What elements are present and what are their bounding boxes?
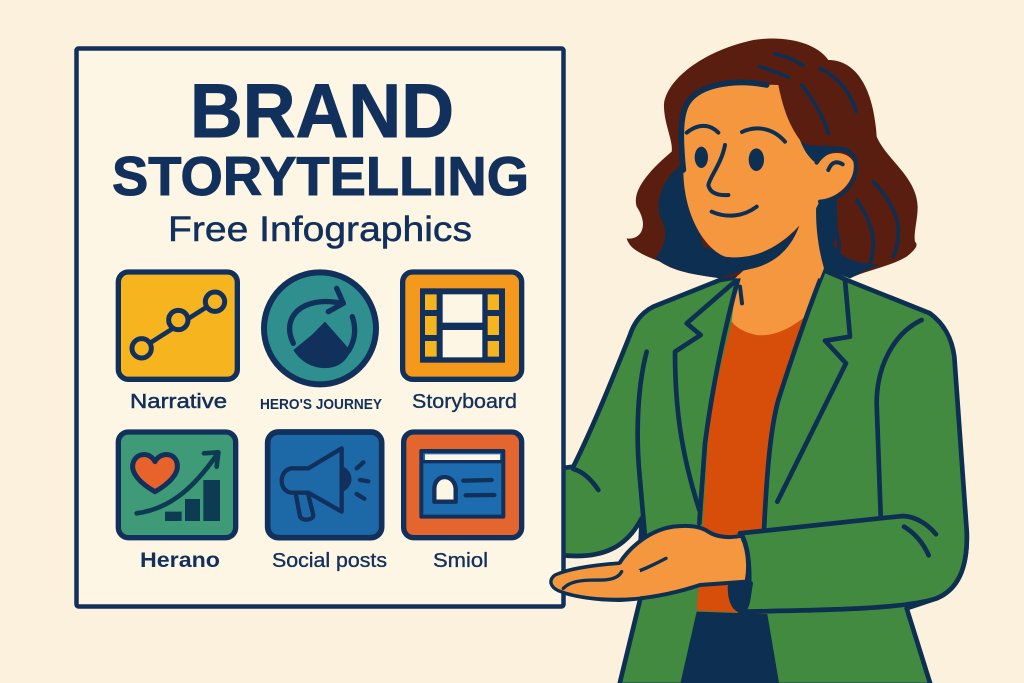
icon: profile card bbox=[404, 432, 522, 538]
icon: hero's journey bbox=[264, 272, 376, 384]
jacket and torso bbox=[560, 265, 967, 683]
label: social posts: Social posts bbox=[272, 550, 387, 572]
title: BRAND bbox=[190, 69, 454, 154]
label: narrative: Narrative bbox=[130, 391, 227, 413]
icon: narrative bbox=[118, 272, 237, 379]
icon: heart and growth bbox=[118, 432, 236, 538]
face bbox=[681, 82, 857, 278]
label: smiol: Smiol bbox=[433, 550, 488, 572]
label: storyboard: Storyboard bbox=[412, 391, 517, 413]
board panel bbox=[76, 48, 564, 606]
title: STORYTELLING bbox=[112, 145, 529, 207]
hair bbox=[627, 39, 918, 278]
label: hero's journey: HERO'S JOURNEY bbox=[260, 396, 382, 413]
title bbox=[112, 69, 529, 207]
hand over board bbox=[551, 563, 640, 599]
forearm and sleeve bbox=[730, 516, 967, 612]
icon: storyboard bbox=[403, 272, 522, 379]
icon: social megaphone bbox=[268, 432, 382, 538]
subtitle: Free Infographics bbox=[168, 210, 472, 249]
label: herano: Herano bbox=[140, 549, 220, 572]
presenter figure bbox=[551, 39, 967, 683]
hand bbox=[551, 526, 748, 600]
